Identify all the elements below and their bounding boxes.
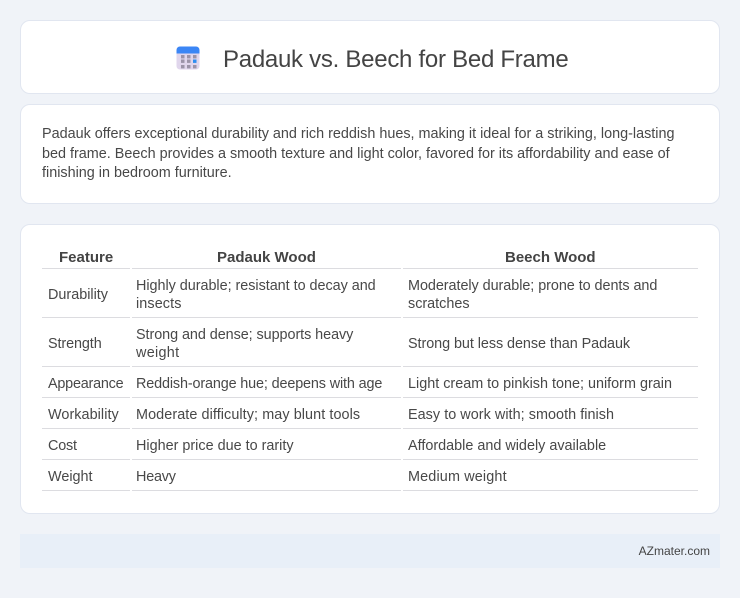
header row: Beech Wood <box>505 249 596 266</box>
description text: Padauk offers exceptional durability and rich reddish hues, making it ideal for a striking, long-lasting <box>42 126 674 142</box>
row: Strength: weight <box>136 345 179 361</box>
title: Padauk vs. Beech for Bed Frame <box>223 46 568 73</box>
description text: finishing in bedroom furniture. <box>42 165 232 181</box>
row: Weight: Heavy <box>136 469 176 485</box>
footer credit: AZmater.com <box>639 544 710 558</box>
row: Durability: insects <box>136 296 182 312</box>
row: Cost: Affordable and widely available <box>408 438 606 454</box>
row: Weight <box>48 469 507 485</box>
row: Workability: Easy to work with; smooth finish <box>408 407 614 423</box>
row: Durability: Highly durable; resistant to decay and <box>136 278 376 294</box>
row: Workability <box>48 407 614 423</box>
row: Strength: Strong and dense; supports heavy <box>136 327 353 343</box>
footer bar <box>20 534 720 568</box>
panel: description card <box>20 104 720 204</box>
header row <box>59 249 596 266</box>
row: Durability: Moderately durable; prone to dents and <box>408 278 657 294</box>
row: Cost: Higher price due to rarity <box>136 438 294 454</box>
row: Cost <box>48 438 606 454</box>
row: Appearance: Light cream to pinkish tone; uniform grain <box>408 376 672 392</box>
panel: comparison table card <box>20 224 720 514</box>
row: Appearance <box>48 376 672 392</box>
description text <box>42 126 674 181</box>
row: Workability: Moderate difficulty; may blunt tools <box>136 407 360 423</box>
row: Weight: Weight <box>48 469 93 485</box>
panel: title card <box>20 20 720 94</box>
row: Strength <box>48 327 630 361</box>
row: Appearance: Reddish-orange hue; deepens with age <box>136 376 382 392</box>
row: Workability: Workability <box>48 407 119 423</box>
row: Durability: scratches <box>408 296 470 312</box>
comparison table <box>42 249 698 491</box>
icon: calendar <box>176 46 200 70</box>
row: Appearance: Appearance <box>48 376 123 392</box>
description text: bed frame. Beech provides a smooth texture and light color, favored for its affordability and ease of <box>42 146 670 162</box>
header row: Feature <box>59 249 113 266</box>
row: Cost: Cost <box>48 438 77 454</box>
header row: Padauk Wood <box>217 249 316 266</box>
row: Durability: Durability <box>48 287 108 303</box>
row: Strength: Strength <box>48 336 102 352</box>
row: Durability <box>48 278 657 312</box>
row: Weight: Medium weight <box>408 469 507 485</box>
row: Strength: Strong but less dense than Padauk <box>408 336 630 352</box>
